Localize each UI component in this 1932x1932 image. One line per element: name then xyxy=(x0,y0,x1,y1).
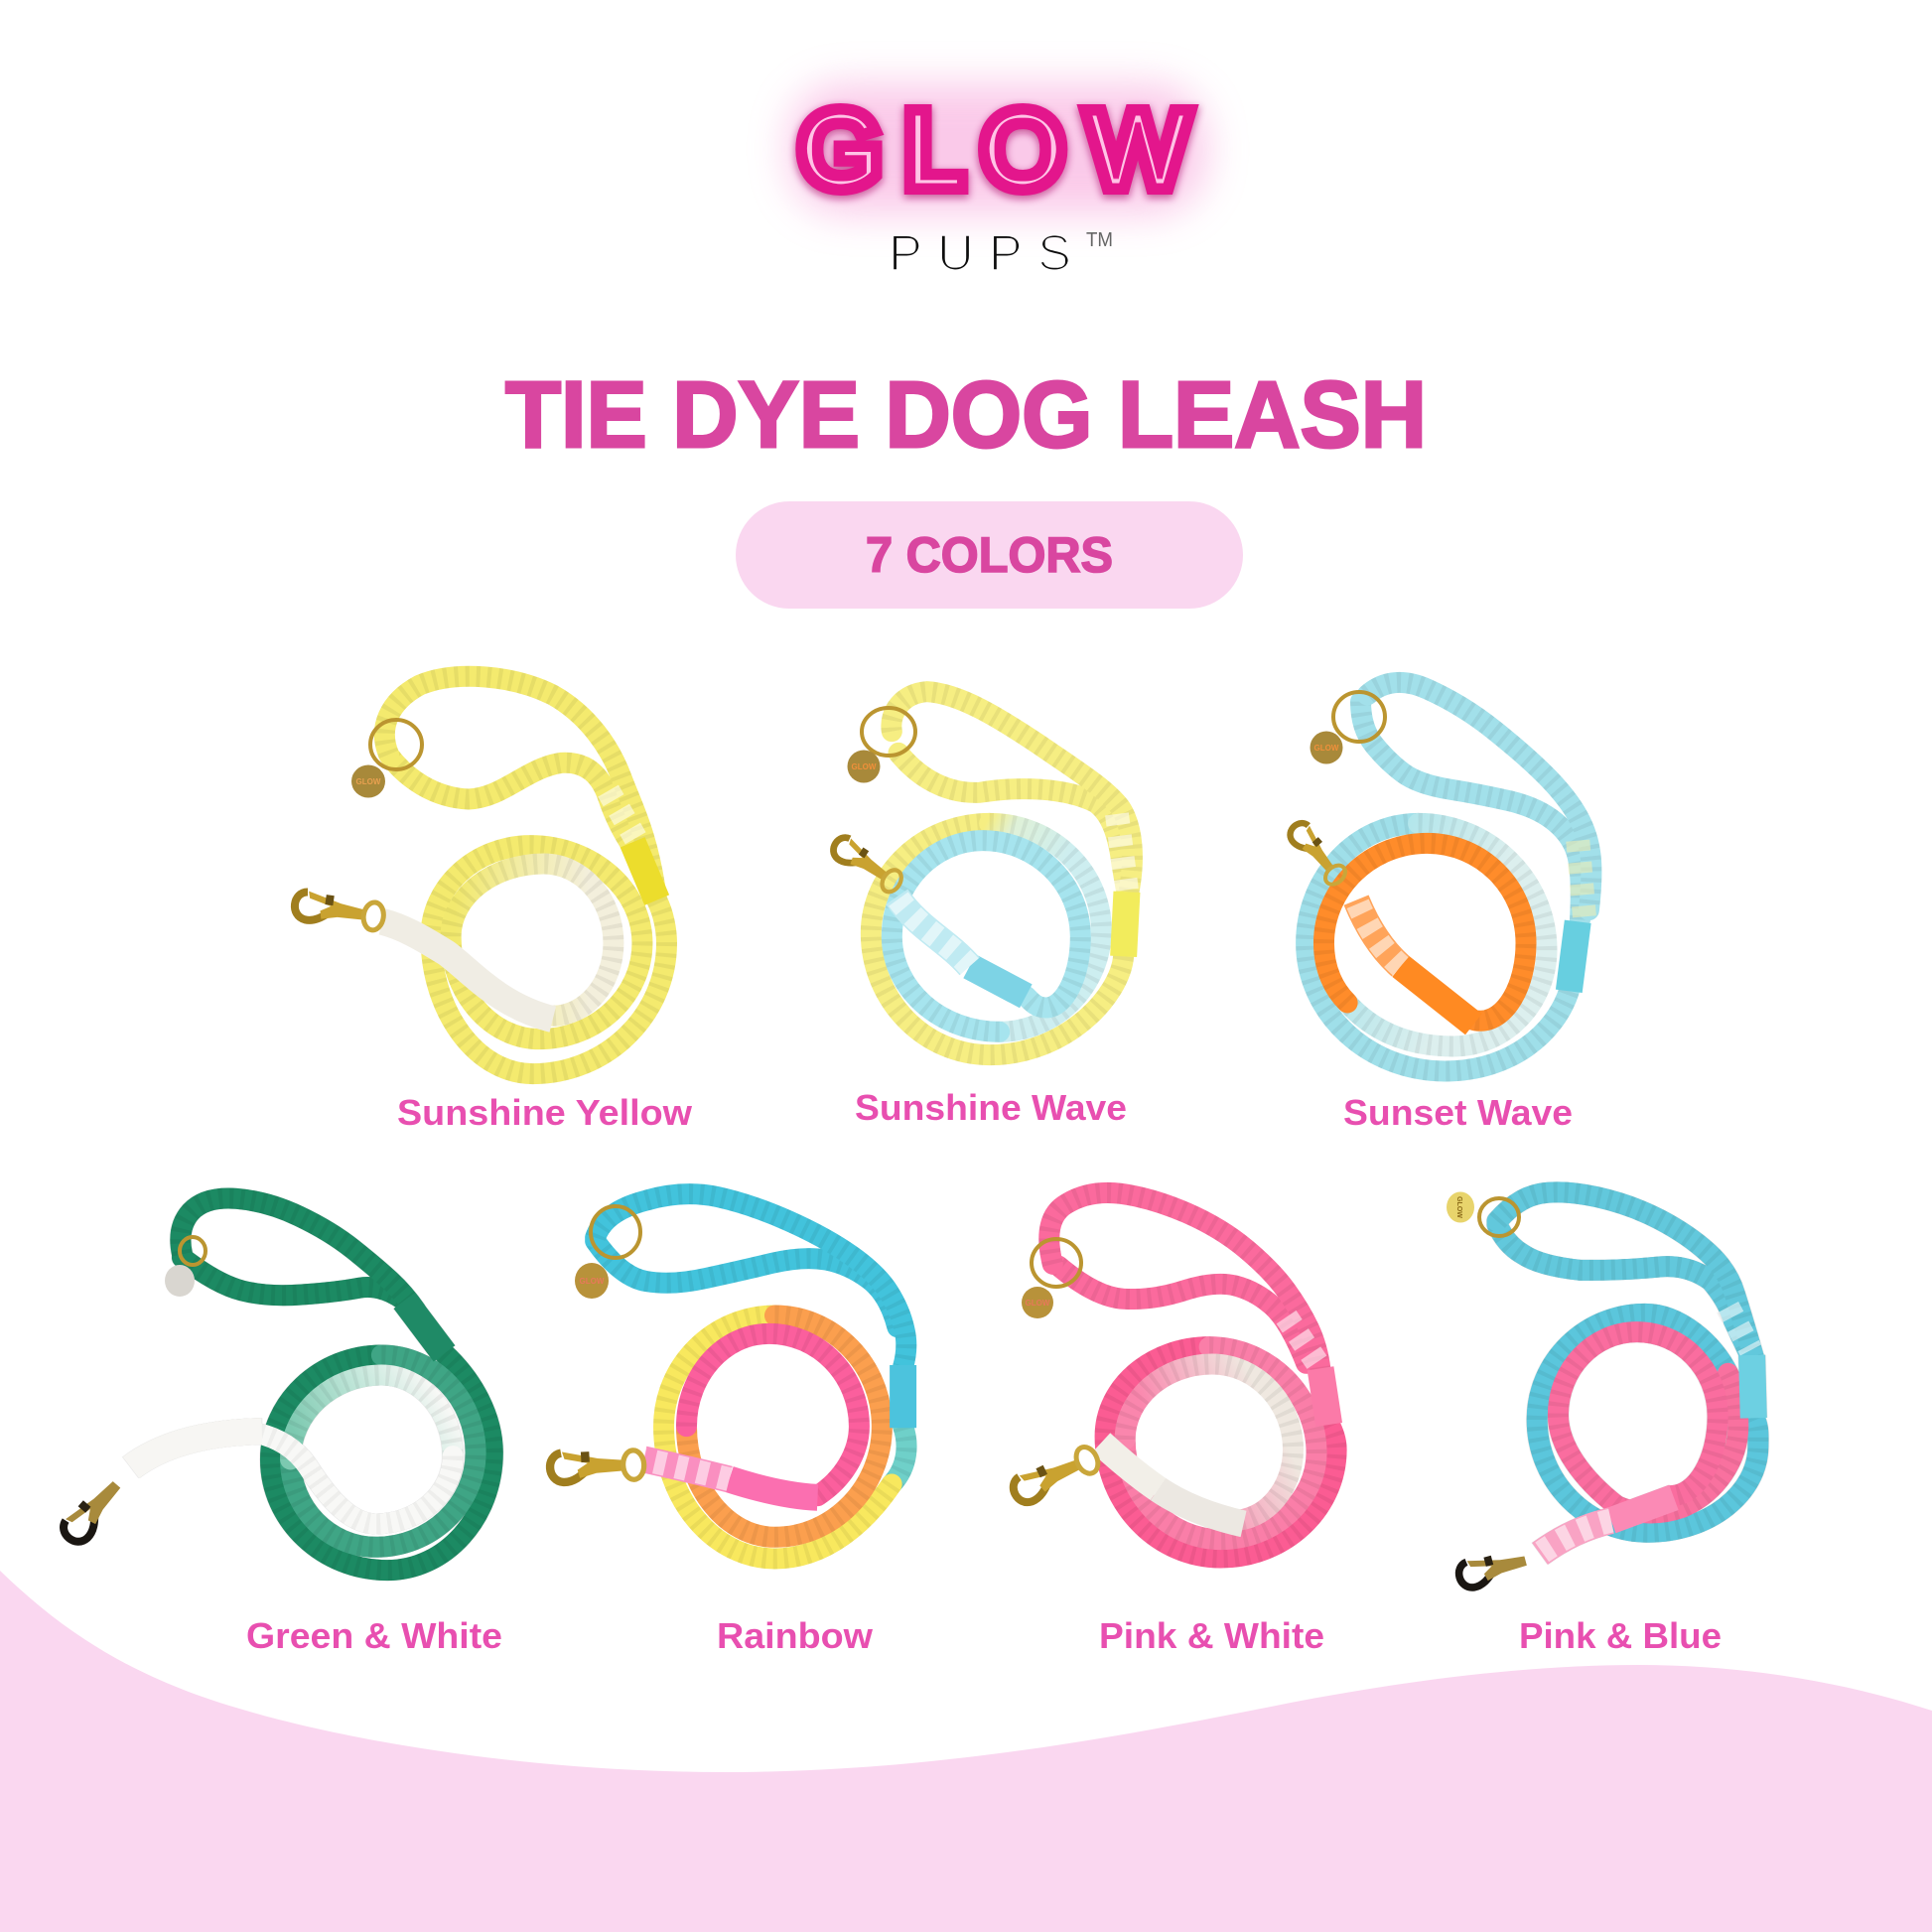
tag: GLOW xyxy=(580,1277,605,1286)
label: Sunshine Yellow: Sunshine Yellow xyxy=(397,1092,693,1133)
label: Sunset Wave: Sunset Wave xyxy=(1343,1092,1573,1133)
snap hook xyxy=(1009,1442,1102,1508)
ring xyxy=(1479,1198,1519,1236)
background wave xyxy=(0,1571,1932,1932)
label: Green & White: Green & White xyxy=(246,1615,502,1656)
tag xyxy=(1311,731,1342,764)
leash: Pink & Blue xyxy=(1447,1191,1758,1590)
pill shape xyxy=(736,501,1243,609)
ring xyxy=(591,1206,640,1258)
rope xyxy=(1497,1192,1758,1554)
title: TIE DYE DOG LEASH xyxy=(505,362,1427,468)
snap hook xyxy=(829,833,906,896)
logo subtitle: PUPS xyxy=(889,224,1071,281)
leash: Sunshine Yellow xyxy=(293,676,666,1074)
leash: Sunshine Wave xyxy=(829,692,1132,1055)
tag: GLOW xyxy=(1455,1196,1462,1218)
leash: Green & White xyxy=(58,1198,492,1571)
snap hook xyxy=(58,1474,126,1547)
tag xyxy=(575,1263,609,1299)
snap hook xyxy=(1456,1546,1529,1590)
label: Pink & Blue: Pink & Blue xyxy=(1519,1615,1722,1656)
snap hook xyxy=(549,1448,644,1484)
logo: Glow Pups xyxy=(789,84,1206,281)
tag xyxy=(165,1265,195,1297)
rope xyxy=(871,692,1132,1055)
trademark: TM xyxy=(1086,229,1113,251)
tag xyxy=(351,764,385,798)
ring xyxy=(1333,692,1385,742)
ring xyxy=(180,1237,206,1265)
tag xyxy=(1022,1287,1053,1318)
leash: Rainbow xyxy=(549,1194,906,1559)
rope xyxy=(1307,682,1591,1071)
tag: GLOW xyxy=(1314,744,1339,753)
leash: Pink & White xyxy=(1009,1192,1336,1558)
rope xyxy=(382,676,666,1074)
rope xyxy=(131,1198,492,1571)
logo neon lines: GLOW xyxy=(799,91,1187,208)
label: Rainbow: Rainbow xyxy=(717,1615,874,1656)
tag xyxy=(1447,1191,1474,1223)
rope xyxy=(1049,1192,1336,1558)
logo wordmark: GLOW xyxy=(799,91,1187,208)
logo wordmark shadow: GLOW xyxy=(799,94,1187,211)
tag: GLOW xyxy=(356,777,381,786)
rope xyxy=(596,1194,906,1559)
logo glow halo xyxy=(789,84,1206,213)
snap hook xyxy=(293,890,385,931)
snap hook xyxy=(1285,818,1350,889)
pill badge: 7 colors xyxy=(736,501,1243,609)
ring xyxy=(862,708,915,756)
pill text: 7 COLORS xyxy=(866,527,1113,583)
label: Sunshine Wave: Sunshine Wave xyxy=(855,1087,1127,1128)
ring xyxy=(370,720,422,769)
tag: GLOW xyxy=(852,762,877,771)
ring xyxy=(1032,1239,1081,1287)
leash: Sunset Wave xyxy=(1285,682,1591,1071)
tag: GLOW xyxy=(1026,1299,1050,1308)
tag xyxy=(848,751,880,782)
label: Pink & White: Pink & White xyxy=(1099,1615,1324,1656)
